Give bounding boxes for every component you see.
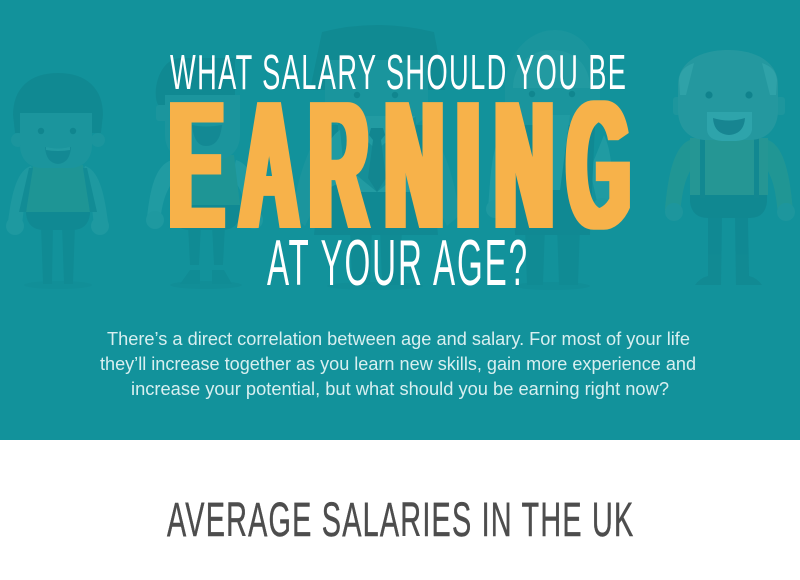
illustration: man in jacket xyxy=(486,30,614,290)
intro paragraph xyxy=(100,329,696,399)
title: line one: WHAT SALARY SHOULD YOU BE xyxy=(170,46,626,100)
illustration: man in suit and tie xyxy=(292,25,460,290)
panel: teal header background xyxy=(0,0,800,440)
section heading: AVERAGE SALARIES IN THE UK xyxy=(167,494,633,547)
intro paragraph: they’ll increase together as you learn new skills, gain more experience and xyxy=(100,354,696,374)
illustration: woman behind title xyxy=(146,58,263,289)
intro paragraph: increase your potential, but what should you be earning right now? xyxy=(131,379,669,399)
title: last line: AT YOUR AGE? xyxy=(267,226,527,299)
illustration: old man with suspenders xyxy=(665,50,795,285)
title: EARNING: EARNING xyxy=(170,62,630,267)
intro paragraph: There’s a direct correlation between age and salary. For most of your life xyxy=(107,329,690,349)
illustration: young man xyxy=(6,73,109,289)
